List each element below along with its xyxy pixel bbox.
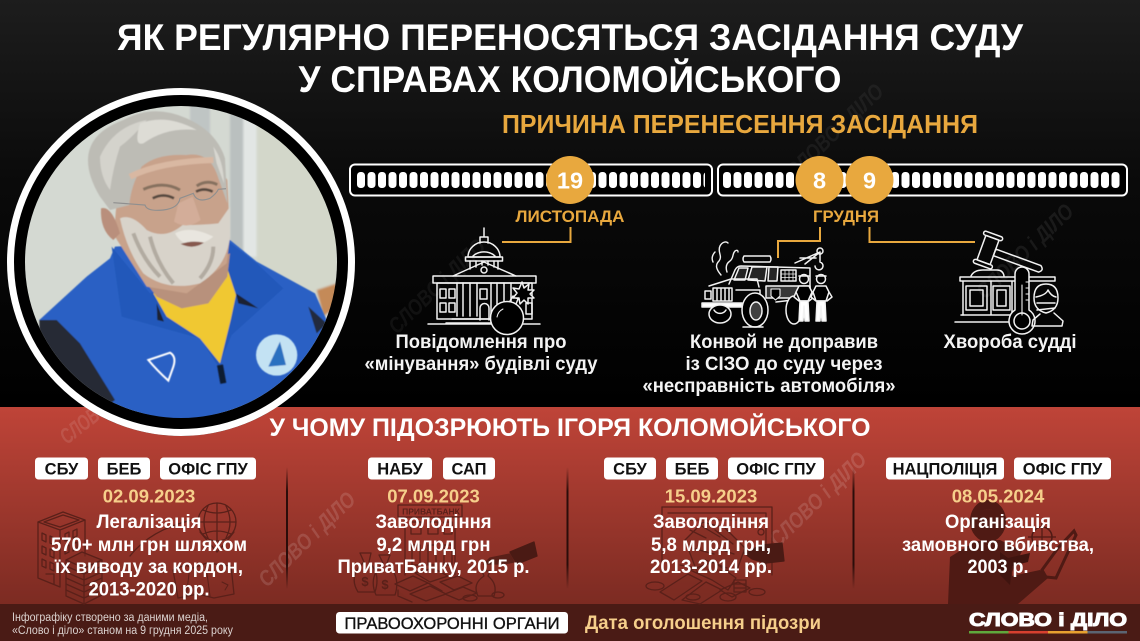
agency badge: BEB [666, 458, 718, 480]
date: 15.09.2023 [665, 486, 757, 506]
description: Заволодіння [376, 512, 492, 533]
description [902, 512, 1094, 578]
watermarks: СЛОВО і ДІЛО [55, 365, 152, 449]
description [338, 512, 530, 578]
date: 08.05.2024 [952, 486, 1045, 506]
description: Організація [945, 512, 1051, 533]
caption: convoy failure: Конвой не доправив [690, 332, 878, 353]
description: 2003 р. [968, 557, 1028, 578]
title: У СПРАВАХ КОЛОМОЙСЬКОГО [298, 58, 842, 100]
date badge 19 [546, 156, 594, 204]
watermarks: СЛОВО і ДІЛО [253, 487, 360, 592]
footer source note: Інфографіку створено за даними медіа, [12, 612, 208, 624]
description: ПриватБанку, 2015 р. [338, 557, 530, 578]
date: 07.09.2023 [387, 486, 480, 506]
description: Легалізація [96, 512, 202, 533]
agency badge: National Police: НАЦПОЛІЦІЯ [893, 460, 997, 478]
icon: court building with bomb [428, 228, 540, 334]
agency badge: SBU [604, 458, 656, 480]
agency badge: SBU [35, 458, 88, 480]
description: 570+ млн грн шляхом [51, 535, 247, 556]
date badge 9 [846, 156, 894, 204]
timeline: December tape [718, 164, 1127, 196]
timeline: November tape [350, 164, 712, 196]
suspicion 4 [886, 458, 1111, 578]
description: 5,8 млрд грн, [651, 535, 771, 556]
legend: law enforcement agencies: ПРАВООХОРОННІ ОРГАНИ [344, 614, 560, 633]
watermarks: СЛОВО і ДІЛО [781, 79, 888, 184]
agency badge: SAP [443, 458, 495, 480]
icon: dark PrivatBank facade and money bags background: ПРИВАТБАНК [402, 506, 461, 516]
icon: dark building, money, globe and map background [38, 503, 236, 604]
caption: bomb threat: «мінування» будівлі суду [364, 354, 598, 375]
month label December: ГРУДНЯ [813, 207, 879, 226]
agency badge: BEB: БЕБ [675, 460, 709, 478]
caption: bomb threat: Повідомлення про [396, 332, 566, 353]
heading: what Kolomoisky is suspected of: У ЧОМУ ПІДОЗРЮЮТЬ ІГОРЯ КОЛОМОЙСЬКОГО [270, 412, 870, 442]
title [117, 17, 1024, 100]
description: 2013-2020 рр. [88, 580, 210, 600]
watermarks: СЛОВО і ДІЛО [383, 234, 490, 339]
description: 2013-2014 рр. [650, 557, 772, 578]
caption: bomb threat [364, 332, 598, 375]
icon: dark PrivatBank facade and money bags background: $ [361, 574, 369, 589]
watermarks: СЛОВО і ДІЛО [764, 447, 871, 552]
portrait: Ihor Kolomoisky [7, 88, 355, 436]
caption: convoy failure: із СІЗО до суду через [686, 354, 882, 375]
description: 9,2 млрд грн [376, 535, 490, 556]
dividers [286, 467, 854, 589]
icon: broken prison truck and two guards [702, 242, 832, 327]
agency badge: SBU: СБУ [613, 460, 648, 478]
agency badge: Prosecutor General's Office: ОФІС ГПУ [1023, 460, 1103, 478]
heading: reason for postponement: ПРИЧИНА ПЕРЕНЕСЕННЯ ЗАСІДАННЯ [502, 109, 978, 139]
footer source note [12, 612, 233, 637]
connector: December 9 to judge [870, 227, 975, 242]
suspicion 3 [604, 458, 824, 578]
panel: dark top background [0, 0, 1140, 407]
agency badge: Prosecutor General's Office [728, 458, 824, 480]
date badge 8 [796, 156, 844, 204]
legend: date of notice of suspicion: Дата оголошення підозри [585, 613, 821, 634]
month label November: ЛИСТОПАДА [516, 207, 624, 226]
caption: convoy failure: «несправність автомобіля» [642, 376, 896, 397]
date badge 9: 9 [863, 168, 876, 194]
description: замовного вбивства, [902, 535, 1094, 556]
footer source note: «Слово і діло» станом на 9 грудня 2025 року [12, 625, 233, 637]
agency badge: BEB [98, 458, 150, 480]
agency badge: NABU [368, 458, 432, 480]
caption: judge illness: Хвороба судді [944, 332, 1076, 353]
date badge 19: 19 [557, 168, 583, 194]
icon: dark PrivatBank facade and money bags background [354, 505, 537, 602]
suspicion 2 [338, 458, 530, 578]
description: Заволодіння [653, 512, 769, 533]
agency badge: Prosecutor General's Office [160, 458, 256, 480]
title: ЯК РЕГУЛЯРНО ПЕРЕНОСЯТЬСЯ ЗАСІДАННЯ СУДУ [117, 17, 1024, 58]
icon: dark hitman silhouette background [948, 504, 1076, 604]
agency badge: Prosecutor General's Office [1014, 458, 1111, 480]
date badge 8: 8 [813, 168, 826, 194]
agency badge: SBU: СБУ [45, 460, 79, 478]
date: 02.09.2023 [103, 486, 195, 506]
description [51, 512, 247, 600]
watermarks: СЛОВО і ДІЛО [971, 199, 1078, 304]
agency badge: BEB: БЕБ [107, 460, 141, 478]
icon: dark PrivatBank facade and money bags background: $ [381, 577, 389, 592]
watermarks [55, 79, 1078, 592]
connector: December 8 to truck [778, 227, 820, 258]
icon: gavel, podium, thermometer and sick judge [955, 231, 1063, 334]
logo: Slovo i Dilo: СЛОВО і ДІЛО [969, 610, 1127, 630]
description: їх виводу за кордон, [54, 557, 243, 578]
caption: convoy failure [642, 332, 896, 397]
agency badge: Prosecutor General's Office: ОФІС ГПУ [168, 460, 248, 478]
agency badge: NABU: НАБУ [377, 460, 424, 478]
panel: footer band [0, 604, 1140, 641]
agency badge: Prosecutor General's Office: ОФІС ГПУ [736, 460, 816, 478]
agency badge: SAP: САП [451, 460, 487, 478]
connector: November to court [502, 227, 570, 242]
suspicion 1 [35, 458, 256, 600]
description [650, 512, 772, 578]
panel: red suspicions background [0, 407, 1140, 604]
icon: dark safe and money pile background [646, 507, 784, 604]
